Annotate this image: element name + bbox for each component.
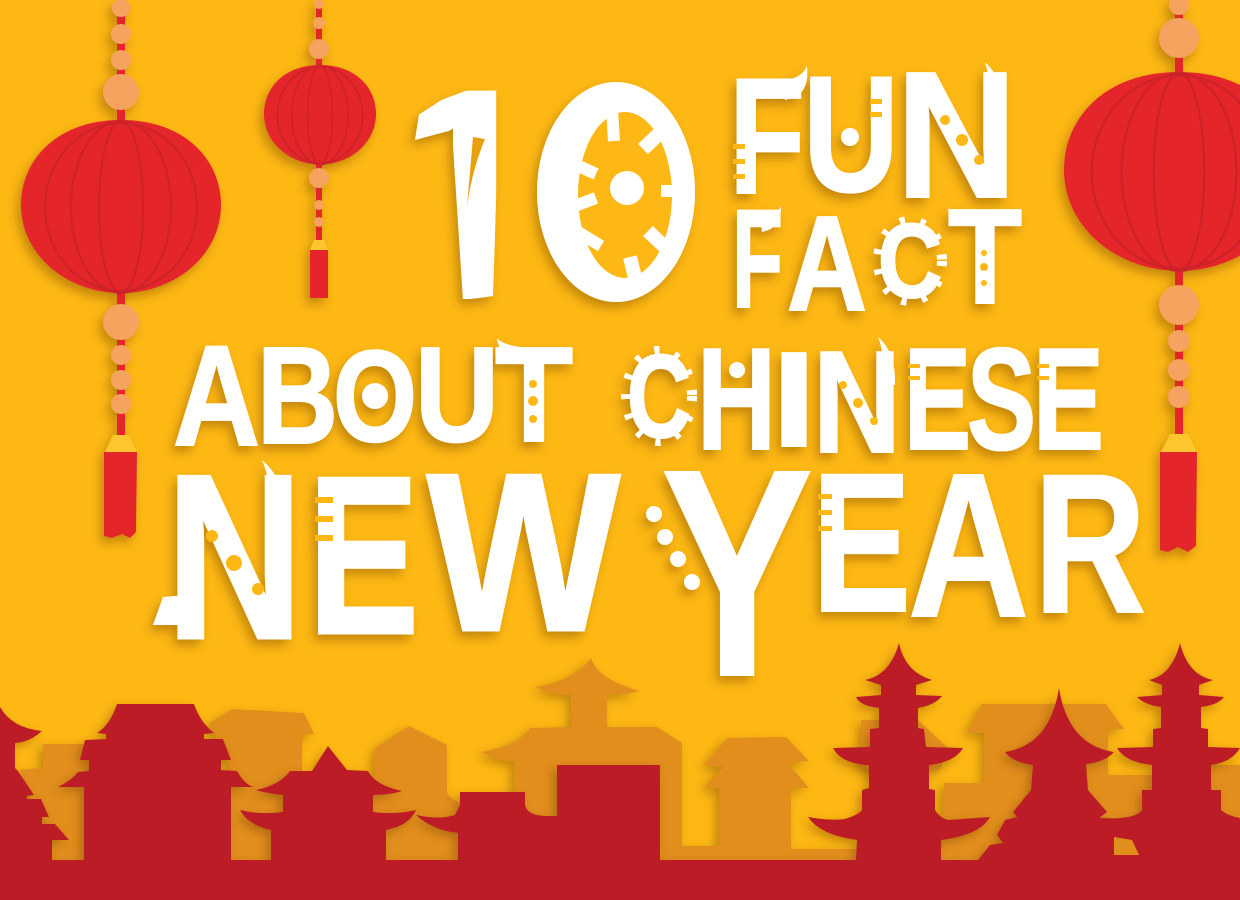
title: NEW: W: [427, 426, 621, 678]
title: CHINESE: S: [967, 318, 1036, 480]
title: ABOUT: B: [257, 319, 338, 473]
title: FUN: [729, 35, 1017, 236]
title: FUN: U: [803, 42, 899, 226]
title: CHINESE: E: [904, 318, 971, 480]
title: FACT: [732, 180, 1022, 339]
title: FACT: C: [878, 203, 942, 320]
title: YEAR: E: [812, 432, 911, 653]
title: number 10: 0: [540, 26, 707, 362]
title: YEAR: Y: [661, 408, 813, 738]
title: ABOUT: [173, 317, 573, 476]
title: ABOUT: A: [173, 317, 260, 476]
title: ABOUT: U: [415, 319, 499, 470]
title: CHINESE: E: [1033, 318, 1104, 480]
lantern: top right large: [1064, 0, 1240, 552]
title: YEAR: R: [1034, 433, 1146, 654]
title: CHINESE: [626, 318, 1104, 483]
title: FACT: A: [787, 188, 867, 339]
title: ABOUT: T: [495, 319, 573, 470]
title: NEW: [153, 425, 621, 688]
skyline: back orange buildings: [20, 658, 1240, 860]
title: ABOUT: O: [333, 323, 417, 469]
title: NEW: N: [166, 425, 303, 688]
title: number 10: 1: [384, 26, 551, 362]
title: YEAR: A: [908, 431, 1029, 660]
title: number 10: [406, 82, 696, 314]
title: CHINESE: C: [627, 331, 691, 463]
title: CHINESE: H: [697, 318, 776, 480]
title: FUN: F: [729, 44, 805, 228]
title: YEAR: [646, 408, 1146, 738]
title: CHINESE: N: [813, 321, 901, 483]
skyline: front red pagodas: [0, 643, 1240, 900]
title: [146, 62, 1144, 688]
title: CHINESE: I: [772, 324, 816, 475]
title: NEW: E: [308, 429, 419, 681]
title: FACT: F: [732, 180, 783, 337]
lantern: top left large: [21, 0, 221, 538]
title: FACT: T: [948, 181, 1022, 332]
title: FUN: N: [896, 35, 1017, 236]
lantern: top centre small: [264, 0, 376, 298]
